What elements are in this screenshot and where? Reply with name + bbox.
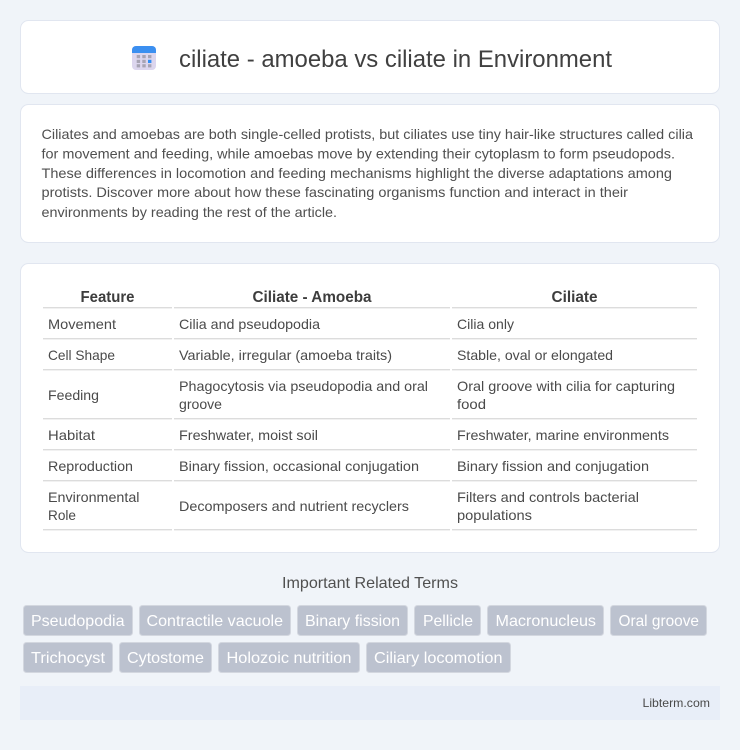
table row: feeding — [43, 378, 697, 419]
tag: Macronucleus — [488, 606, 604, 636]
table row: environmental role: Role — [48, 507, 76, 523]
tag: Holozoic nutrition: Holozoic nutrition — [226, 650, 352, 667]
table row: reproduction: Binary fission, occasional conjugation — [179, 458, 419, 474]
text block: introduction — [42, 126, 693, 220]
table row: movement: Cilia only — [457, 316, 514, 332]
table row: cell shape: Variable, irregular (amoeba traits) — [179, 347, 392, 363]
table row: cell shape — [43, 347, 697, 370]
tag: Pseudopodia: Pseudopodia — [31, 613, 125, 630]
table row: habitat: Freshwater, moist soil — [179, 427, 318, 443]
table header row: Ciliate — [552, 289, 598, 306]
text block: introduction: environments by reading the rest of the article. — [42, 204, 337, 220]
tag: Pellicle — [414, 606, 480, 636]
table row: cell shape: Cell Shape — [48, 347, 115, 363]
panel: comparison table — [20, 264, 720, 552]
table row: environmental role: Filters and controls bacterial — [457, 489, 639, 505]
panel: introduction paragraph — [20, 104, 720, 242]
tag: Cytostome — [120, 642, 212, 672]
table row: feeding: Phagocytosis via pseudopodia and oral — [179, 378, 428, 394]
tag: Cytostome: Cytostome — [127, 650, 204, 667]
table header row: Feature — [80, 289, 135, 306]
table row: habitat: Habitat — [48, 427, 95, 443]
tag: Contractile vacuole — [140, 606, 290, 636]
table row: environmental role: populations — [457, 507, 532, 523]
table row: cell shape: Stable, oval or elongated — [457, 347, 613, 363]
tag: Trichocyst — [24, 642, 112, 672]
tag: Ciliary locomotion — [366, 642, 510, 672]
footer credit: Libterm.com — [642, 696, 710, 710]
tag: Binary fission: Binary fission — [305, 613, 400, 630]
tag: Trichocyst: Trichocyst — [31, 650, 106, 667]
table row: environmental role: Environmental — [48, 489, 140, 505]
tag: Oral groove — [610, 606, 706, 636]
heading: important related terms: Important Related Terms — [282, 575, 458, 592]
table row: feeding: Oral groove with cilia for capturing — [457, 378, 675, 394]
tag list: related terms — [24, 606, 706, 672]
table row: movement: Movement — [48, 316, 116, 332]
table row: feeding: groove — [179, 396, 222, 412]
table row: feeding: food — [457, 396, 486, 412]
tag: Binary fission — [298, 606, 408, 636]
table row: reproduction: Binary fission and conjugation — [457, 458, 649, 474]
tag: Ciliary locomotion: Ciliary locomotion — [374, 650, 502, 667]
table row: movement: Cilia and pseudopodia — [179, 316, 320, 332]
panel: title header — [20, 20, 720, 94]
text block: introduction: Ciliates and amoebas are both single-celled protists, but ciliates use tiny hair-like structures called cilia — [42, 126, 693, 142]
footer bar — [20, 686, 720, 720]
table row: environmental role — [43, 489, 697, 530]
table header row — [43, 289, 697, 308]
tag: Pellicle: Pellicle — [423, 613, 473, 630]
table row: habitat: Freshwater, marine environments — [457, 427, 669, 443]
text block: introduction: protists. Discover more about how these fascinating organisms function and interact in their — [42, 184, 628, 200]
table row: movement — [43, 316, 697, 339]
table row: reproduction: Reproduction — [48, 458, 133, 474]
text block: introduction: for movement and feeding, while amoebas move by extending their cytoplasm to form pseudopods. — [42, 146, 675, 162]
tag: Holozoic nutrition — [218, 642, 360, 672]
text block: introduction: These differences in locomotion and feeding mechanisms highlight the diverse adaptations among — [42, 165, 672, 181]
table row: habitat — [43, 427, 697, 450]
table row: reproduction — [43, 458, 697, 481]
tag: Oral groove: Oral groove — [618, 613, 699, 630]
table row: environmental role: Decomposers and nutrient recyclers — [179, 498, 409, 514]
tag: Pseudopodia — [24, 606, 132, 636]
title: ciliate - amoeba vs ciliate in Environment — [179, 46, 612, 73]
icon: calendar grid — [132, 46, 156, 70]
tag: Macronucleus: Macronucleus — [496, 613, 596, 630]
table header row: Ciliate - Amoeba — [252, 289, 372, 306]
tag: Contractile vacuole: Contractile vacuole — [146, 613, 283, 630]
table row: feeding: Feeding — [48, 387, 99, 403]
